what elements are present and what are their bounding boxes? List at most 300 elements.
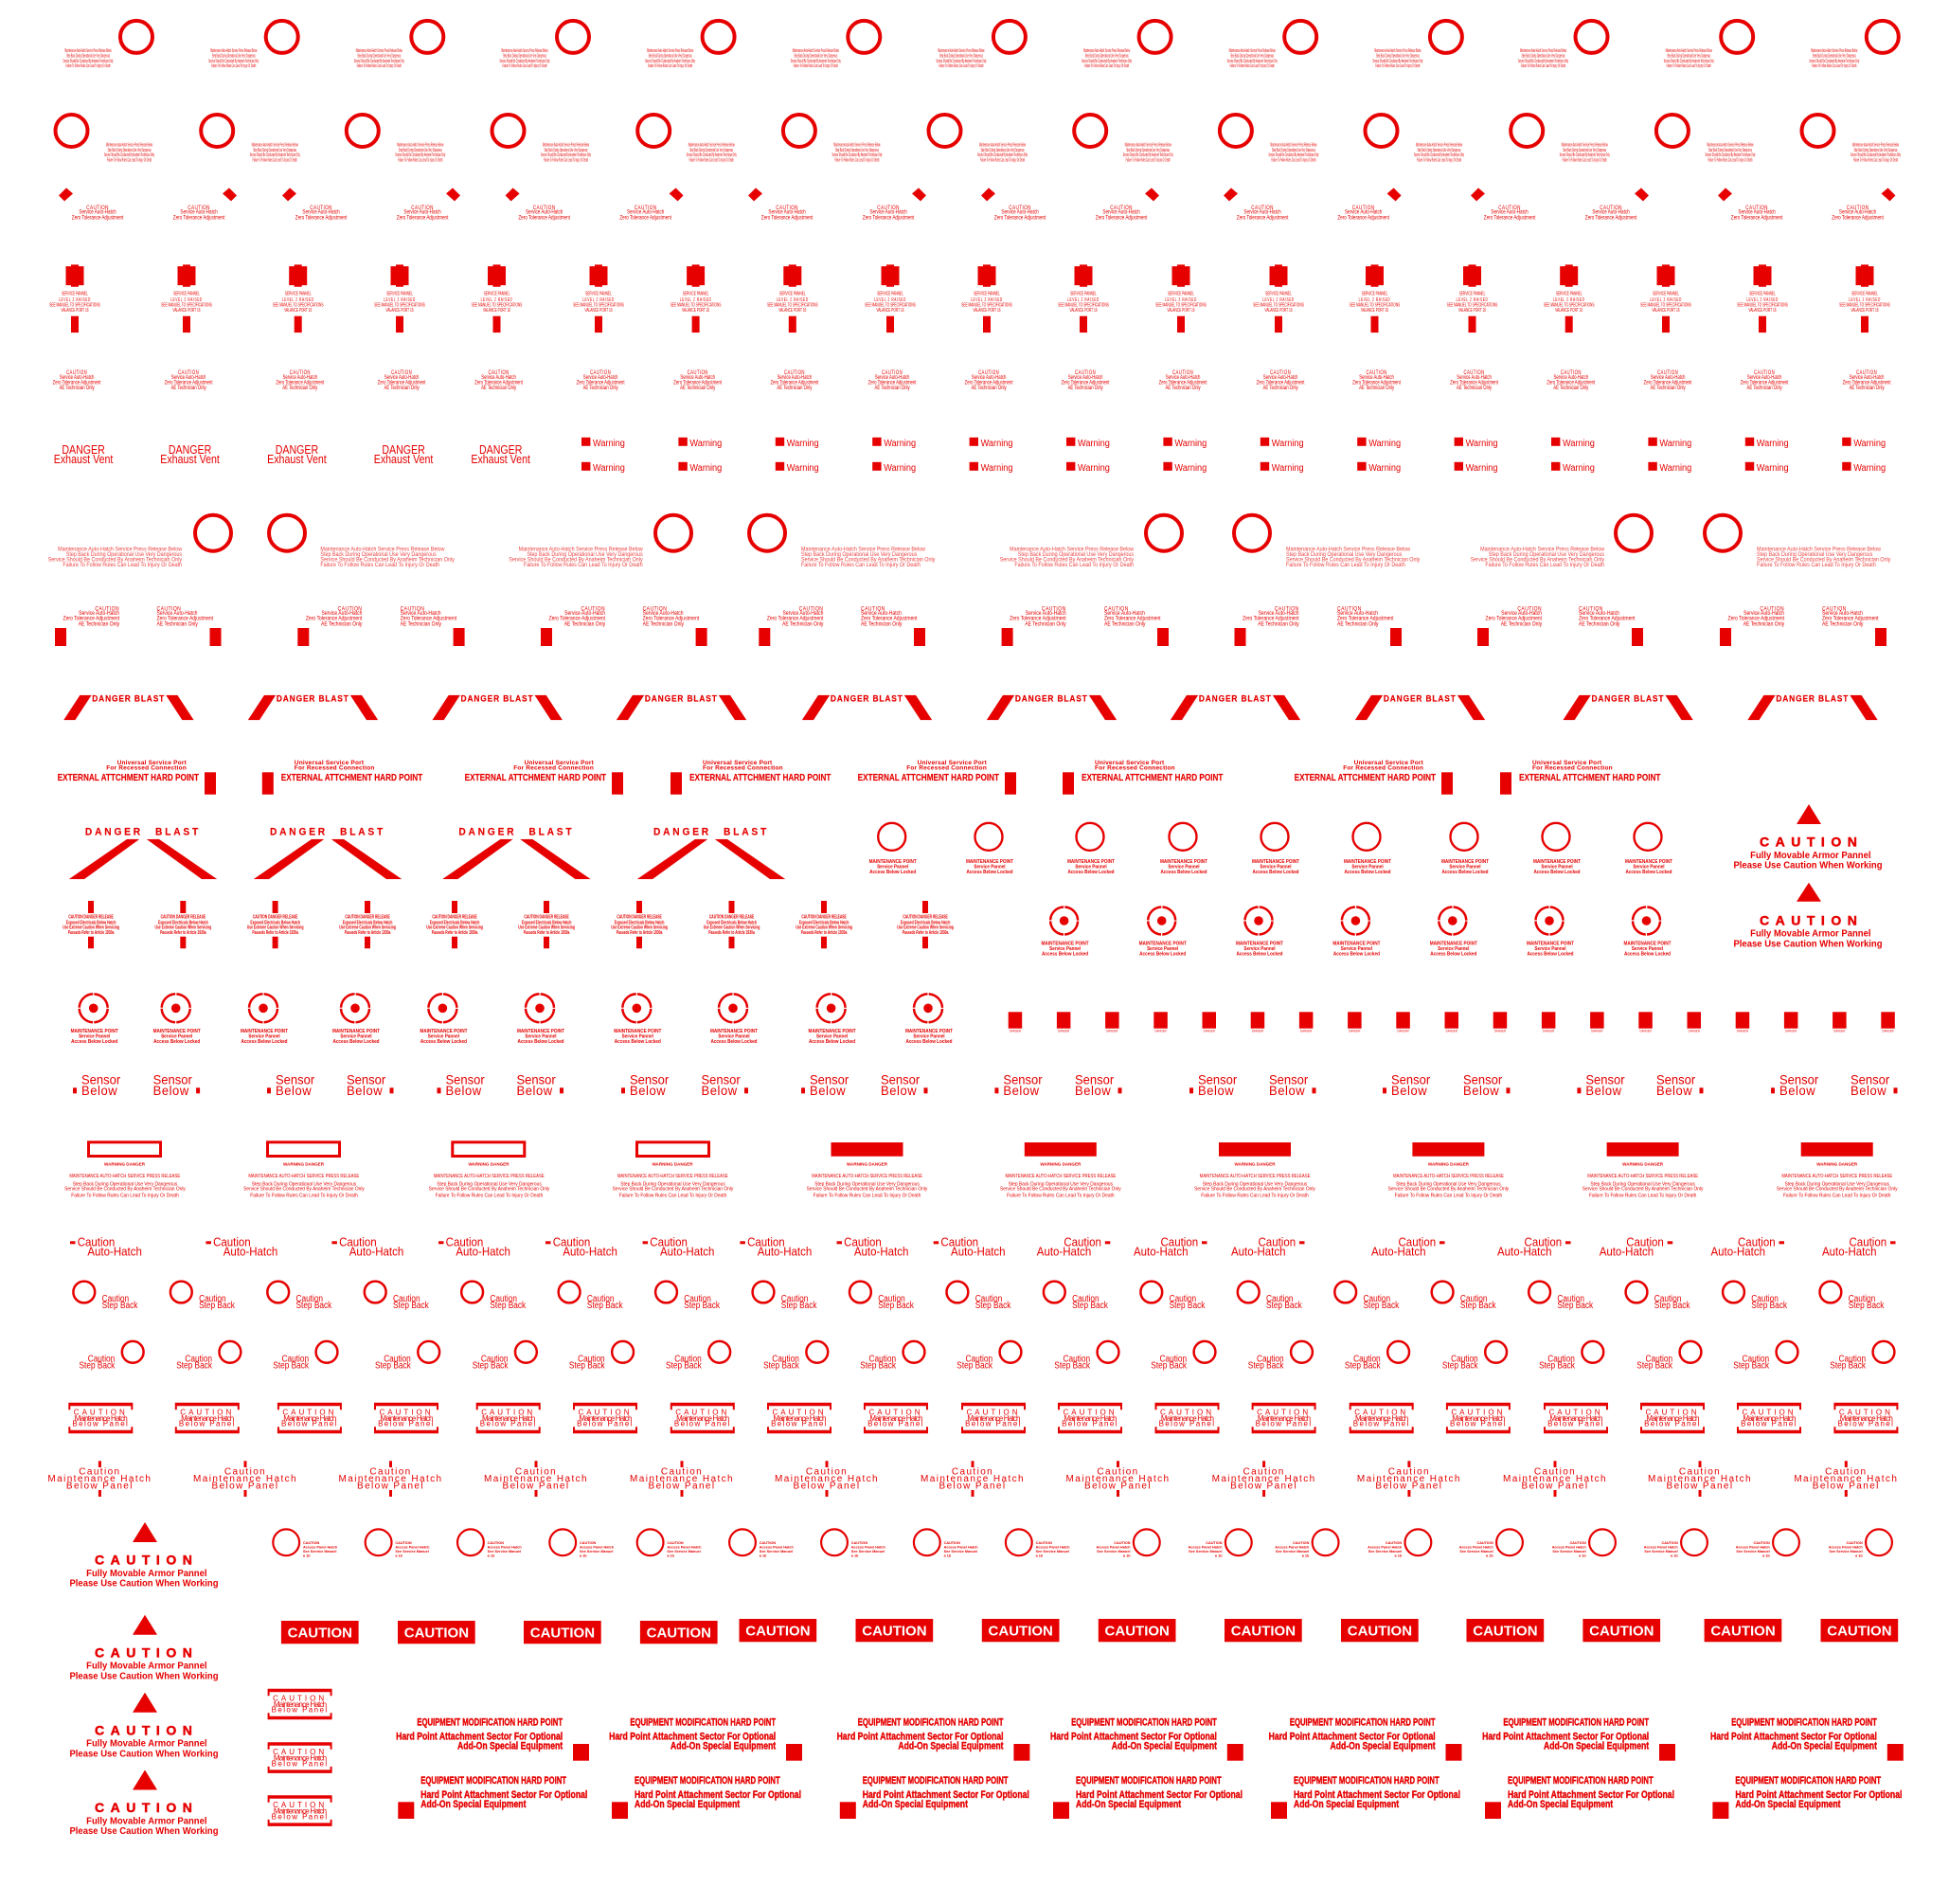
access sign: See Service Manuel xyxy=(395,1549,429,1554)
sign: VALANCE PORT 16 xyxy=(1652,307,1680,313)
sign: Maintenance Auto-Hatch Service Press Release Below xyxy=(1125,143,1171,148)
access sign: Access Panel Hatch xyxy=(1829,1544,1863,1550)
maintenance point xyxy=(1252,823,1299,875)
step back: Step Back xyxy=(176,1360,212,1370)
warning panel: WARNING DANGER xyxy=(469,1161,510,1166)
access sign: CAUTION xyxy=(1293,1540,1309,1545)
label: Caution xyxy=(650,1235,688,1249)
sign: Zero Tolerance Adjustment xyxy=(994,215,1046,222)
warning xyxy=(581,438,625,449)
bracket label: Below Panel xyxy=(1837,1420,1894,1428)
sign: CAUTION xyxy=(188,205,210,211)
bracket label: Below Panel xyxy=(867,1420,924,1428)
step back xyxy=(763,1341,828,1370)
access sign: CAUTION xyxy=(760,1540,776,1545)
bracket label: Maintenance Hatch xyxy=(676,1414,729,1423)
text block: CAUTION xyxy=(1856,369,1877,376)
hard point: EXTERNAL ATTCHMENT HARD POINT xyxy=(58,771,199,782)
warning panel: Failure To Follow Rules Can Lead To Injury Or Death xyxy=(619,1193,726,1198)
sign xyxy=(1705,515,1891,568)
sign: SERVICE PANNEL xyxy=(484,291,510,296)
warning panel: MAINTENANCE AUTO-HATCH SERVICE PRESS RELEASE xyxy=(1200,1173,1311,1179)
target: Service Pannel xyxy=(816,1033,849,1040)
warning: Warning xyxy=(1174,439,1207,449)
label: DANGER xyxy=(276,443,318,457)
badge xyxy=(398,1621,475,1644)
row: warning danger filled boxes xyxy=(807,1142,1898,1198)
warning panel: Step Back During Operational Use Very Dangerous xyxy=(437,1181,542,1187)
sign: Zero Tolerance Adjustment xyxy=(1010,616,1066,622)
sign: Failure To Follow Rules Can Lead To Injury Or Death xyxy=(834,157,879,163)
warning panel: Failure To Follow Rules Can Lead To Injury Or Death xyxy=(1589,1193,1696,1198)
warning panel: WARNING DANGER xyxy=(1040,1161,1082,1166)
hatch label: Below Panel xyxy=(1813,1482,1880,1492)
text block: Service Auto-Hatch xyxy=(1068,374,1102,381)
hard point: Hard Point Attachment Sector For Optional xyxy=(1294,1789,1460,1801)
text block: Service Auto-Hatch xyxy=(171,374,206,381)
maintenance point xyxy=(1533,823,1581,875)
warning xyxy=(1261,462,1304,474)
release sign: Use Extreme Caution When Servicing xyxy=(426,925,483,930)
bracket label: Below Panel xyxy=(378,1420,435,1428)
text block: Zero Tolerance Adjustment xyxy=(770,380,819,386)
access sign: Access Panel Hatch xyxy=(851,1544,885,1550)
label xyxy=(837,1235,908,1259)
access sign xyxy=(1644,1529,1708,1557)
bracket label: Maintenance Hatch xyxy=(482,1414,535,1423)
danger block: DANGER xyxy=(1639,1029,1652,1033)
row: small circles with text right xyxy=(273,1529,1070,1557)
step back xyxy=(655,1282,720,1310)
sign xyxy=(1839,264,1890,332)
label: Caution xyxy=(553,1235,590,1249)
sign: LEVEL 2 RAISED xyxy=(1849,296,1881,302)
sign: CAUTION xyxy=(310,205,332,211)
maintenance point: Service Pannel xyxy=(1633,864,1665,871)
step back: Caution xyxy=(578,1354,605,1363)
target xyxy=(1430,907,1477,958)
sign: Service Auto-Hatch xyxy=(1026,610,1066,617)
bracket label: CAUTION xyxy=(1646,1408,1699,1417)
sign: Failure To Follow Rules Can Lead To Injury Or Death xyxy=(648,63,692,68)
step back: Caution xyxy=(1451,1354,1478,1363)
hard point: EXTERNAL ATTCHMENT HARD POINT xyxy=(858,771,999,782)
label: Auto-Hatch xyxy=(563,1245,617,1259)
sensor: Below xyxy=(1585,1084,1622,1098)
label: Auto-Hatch xyxy=(1134,1245,1188,1259)
release sign: CAUTION DANGER RELEASE xyxy=(161,914,206,920)
sensor: Sensor xyxy=(1198,1072,1237,1087)
sign: AE Technician Only xyxy=(79,621,119,628)
hard point: Universal Service Port xyxy=(1095,760,1164,766)
sign: Step Back During Operational Use Very Dangerous xyxy=(527,552,643,558)
text block: AE Technician Only xyxy=(680,385,715,391)
danger block: DANGER xyxy=(1446,1029,1457,1033)
warning panel xyxy=(1777,1142,1898,1198)
bracket label: Maintenance Hatch xyxy=(181,1414,234,1423)
sign: LEVEL 2 RAISED xyxy=(1650,296,1682,302)
sign: LEVEL 2 RAISED xyxy=(582,296,615,302)
danger blast xyxy=(63,693,193,720)
maintenance point: Service Pannel xyxy=(1075,864,1107,871)
bracket label: Maintenance Hatch xyxy=(1452,1414,1505,1423)
label: Caution xyxy=(1161,1235,1198,1249)
sign: Failure To Follow Rules Can Lead To Injury Or Death xyxy=(1230,63,1275,68)
label xyxy=(1037,1235,1110,1259)
sign: AE Technician Only xyxy=(1501,621,1542,628)
row: small circles with text left xyxy=(1097,1529,1892,1557)
maintenance point: MAINTENANCE POINT xyxy=(1252,860,1299,865)
hatch label: Maintenance Hatch xyxy=(1212,1474,1316,1484)
caution block xyxy=(69,1769,219,1837)
step back xyxy=(273,1341,337,1370)
row: service panel signs xyxy=(49,264,1890,332)
hard point xyxy=(837,1716,1029,1761)
text block: Service Auto-Hatch xyxy=(1747,374,1781,381)
sign xyxy=(273,264,324,332)
hard point: EQUIPMENT MODIFICATION HARD POINT xyxy=(1290,1716,1436,1729)
row: warning labels upper xyxy=(581,438,1886,449)
text block: Zero Tolerance Adjustment xyxy=(673,380,722,386)
hatch label: Caution xyxy=(661,1466,703,1477)
step back xyxy=(1529,1282,1594,1310)
sign: AE Technician Only xyxy=(1579,621,1619,628)
sign: Service Should Be Conducted By Anaheim Technician Only xyxy=(1664,59,1714,63)
access sign: CAUTION xyxy=(667,1540,684,1545)
hard point xyxy=(262,760,422,795)
sign: Service Auto-Hatch xyxy=(564,610,605,617)
bracket label: Below Panel xyxy=(272,1759,329,1768)
sign: Maintenance Auto-Hatch Service Press Release Below xyxy=(58,547,182,553)
sign: LEVEL 2 RAISED xyxy=(170,296,203,302)
hatch label: Caution xyxy=(369,1466,412,1477)
hard point xyxy=(1485,1775,1674,1819)
sign xyxy=(208,21,298,68)
sign: Failure To Follow Rules Can Lead To Injury Or Death xyxy=(689,157,734,163)
access sign: Access Panel Hatch xyxy=(395,1544,430,1550)
sign: Service Should Be Conducted By Anaheim Technician Only xyxy=(63,59,114,63)
label: Exhaust Vent xyxy=(54,453,114,466)
sensor: Sensor xyxy=(1269,1072,1308,1087)
warning panel xyxy=(613,1142,734,1198)
step back: Step Back xyxy=(684,1300,720,1310)
danger block: DANGER xyxy=(1106,1029,1118,1033)
badge: CAUTION xyxy=(1710,1624,1776,1640)
release sign: CAUTION DANGER RELEASE xyxy=(345,914,390,920)
hard point xyxy=(1710,1716,1904,1761)
hatch label: Below Panel xyxy=(648,1482,716,1492)
sign xyxy=(269,515,455,568)
text block: Zero Tolerance Adjustment xyxy=(1450,380,1498,386)
text block: Zero Tolerance Adjustment xyxy=(577,380,625,386)
warning panel: MAINTENANCE AUTO-HATCH SERVICE PRESS RELEASE xyxy=(434,1173,545,1179)
bracket label: Maintenance Hatch xyxy=(274,1806,327,1815)
row: equipment hard points upper xyxy=(396,1716,1904,1761)
sign xyxy=(1579,606,1643,646)
warning panel: Failure To Follow Rules Can Lead To Injury Or Death xyxy=(436,1193,543,1198)
label xyxy=(545,1235,617,1259)
hard point xyxy=(1482,1716,1675,1761)
hatch label: Below Panel xyxy=(939,1482,1006,1492)
bracket label: CAUTION xyxy=(74,1408,128,1417)
danger blast xyxy=(69,826,217,879)
label: Caution xyxy=(1738,1235,1776,1249)
warning: Warning xyxy=(1466,439,1497,449)
sign: Maintenance Auto-Hatch Service Press Release Below xyxy=(1520,48,1566,54)
label: Caution xyxy=(1259,1235,1296,1249)
step back: Caution xyxy=(1170,1293,1196,1303)
label: Caution xyxy=(1525,1235,1562,1249)
danger blast xyxy=(1564,693,1693,720)
step back: Caution xyxy=(781,1293,808,1303)
label xyxy=(1231,1235,1305,1259)
sign: Zero Tolerance Adjustment xyxy=(863,215,915,222)
sensor: Sensor xyxy=(881,1072,920,1087)
target: Service Pannel xyxy=(913,1033,945,1040)
hatch label: Below Panel xyxy=(212,1482,278,1492)
sensor xyxy=(267,1072,315,1098)
access sign: a 1b xyxy=(1302,1553,1310,1557)
sign: CAUTION xyxy=(1745,205,1768,211)
sensor: Below xyxy=(1075,1084,1111,1098)
text block: Zero Tolerance Adjustment xyxy=(1547,380,1596,386)
access sign: Access Panel Hatch xyxy=(1552,1544,1586,1550)
row: warning danger outlined boxes xyxy=(64,1142,734,1198)
release sign xyxy=(426,901,483,948)
release sign: CAUTION DANGER RELEASE xyxy=(253,914,297,920)
sensor xyxy=(1383,1072,1431,1098)
label: Auto-Hatch xyxy=(1497,1245,1551,1259)
release sign: Passeds Refer to Article 1930a xyxy=(252,929,298,935)
sign: CAUTION xyxy=(1104,606,1129,613)
text block: CAUTION xyxy=(1075,369,1096,376)
bracket label: Below Panel xyxy=(72,1420,129,1428)
sensor xyxy=(1189,1072,1238,1098)
sign: LEVEL 2 RAISED xyxy=(384,296,416,302)
hard point xyxy=(58,760,216,795)
sign: CAUTION xyxy=(877,205,900,211)
sign: Step Back During Operational Use Very Dangerous xyxy=(1376,54,1420,59)
hatch label: Below Panel xyxy=(1375,1482,1442,1492)
target: MAINTENANCE POINT xyxy=(420,1030,467,1034)
warning xyxy=(1842,438,1886,449)
bracket label xyxy=(68,1403,133,1433)
sign xyxy=(861,606,925,646)
warning xyxy=(970,438,1012,449)
bracket label xyxy=(1058,1403,1122,1433)
warning panel: Step Back During Operational Use Very Dangerous xyxy=(1203,1181,1307,1187)
hatch label: Caution xyxy=(1679,1466,1721,1477)
label: DANGER xyxy=(479,443,522,457)
release sign: Exposed Electricals Below Hatch xyxy=(799,920,849,925)
access sign xyxy=(914,1529,978,1557)
bracket label xyxy=(864,1403,928,1433)
step back xyxy=(559,1282,623,1310)
hatch label xyxy=(1357,1461,1461,1497)
step back: Step Back xyxy=(80,1360,116,1370)
label: Auto-Hatch xyxy=(951,1245,1006,1259)
sign: Step Back During Operational Use Very Dangerous xyxy=(1085,54,1129,59)
bracket label: CAUTION xyxy=(273,1801,327,1809)
target: Service Pannel xyxy=(161,1033,193,1040)
target: MAINTENANCE POINT xyxy=(809,1030,856,1034)
sign: Zero Tolerance Adjustment xyxy=(295,215,348,222)
danger block: DANGER xyxy=(1349,1029,1361,1033)
sign xyxy=(282,188,348,222)
access sign: CAUTION xyxy=(303,1540,319,1545)
sign: AE Technician Only xyxy=(1822,621,1863,628)
hatch label: Maintenance Hatch xyxy=(1794,1474,1898,1484)
maintenance point: Access Below Locked xyxy=(869,870,916,875)
warning panel: MAINTENANCE AUTO-HATCH SERVICE PRESS RELEASE xyxy=(1005,1173,1117,1179)
warning panel xyxy=(1194,1142,1315,1198)
sensor: Below xyxy=(276,1084,312,1098)
sign xyxy=(1518,21,1608,68)
access sign: See Service Manuel xyxy=(1829,1549,1863,1554)
warning xyxy=(1455,438,1497,449)
sign: Zero Tolerance Adjustment xyxy=(1337,616,1394,622)
sign xyxy=(748,188,814,222)
sign xyxy=(791,21,880,68)
sign: VALANCE PORT 16 xyxy=(172,307,201,313)
danger blast xyxy=(1748,693,1877,720)
hard point xyxy=(858,760,1016,795)
text block: Zero Tolerance Adjustment xyxy=(868,380,917,386)
sign: AE Technician Only xyxy=(1104,621,1145,628)
sign: Step Back During Operational Use Very Dangerous xyxy=(212,54,256,59)
hard point xyxy=(465,760,623,795)
step back xyxy=(170,1282,235,1310)
sign: Service Should Be Conducted By Anaheim Technician Only xyxy=(1227,59,1278,63)
sign xyxy=(374,264,425,332)
sign: Zero Tolerance Adjustment xyxy=(397,215,449,222)
warning panel: MAINTENANCE AUTO-HATCH SERVICE PRESS RELEASE xyxy=(617,1173,728,1179)
sign: LEVEL 2 RAISED xyxy=(282,296,314,302)
target: Access Below Locked xyxy=(517,1039,564,1045)
step back: Caution xyxy=(1547,1354,1575,1363)
maintenance point: Service Pannel xyxy=(1449,864,1481,871)
step back xyxy=(1442,1341,1507,1370)
step back: Step Back xyxy=(1266,1300,1302,1310)
warning xyxy=(1551,462,1595,474)
badge: CAUTION xyxy=(1827,1624,1892,1640)
label xyxy=(438,1235,510,1259)
row: caution step back then circle xyxy=(80,1341,1894,1370)
step back: Caution xyxy=(587,1293,614,1303)
caution block xyxy=(1733,804,1883,871)
sign: AE Technician Only xyxy=(1258,621,1299,628)
hard point: Add-On Special Equipment xyxy=(1076,1799,1182,1810)
warning xyxy=(1066,438,1110,449)
hard point: Hard Point Attachment Sector For Optional xyxy=(609,1731,776,1743)
danger block xyxy=(1688,1012,1701,1033)
maintenance point: MAINTENANCE POINT xyxy=(1441,860,1489,865)
target: MAINTENANCE POINT xyxy=(241,1030,288,1034)
hatch label: Maintenance Hatch xyxy=(775,1474,879,1484)
text block: Zero Tolerance Adjustment xyxy=(1159,380,1207,386)
danger blast: DANGER BLAST xyxy=(1015,693,1088,704)
label: DANGER xyxy=(62,443,105,457)
step back: Caution xyxy=(1353,1354,1381,1363)
sign: SERVICE PANNEL xyxy=(1851,291,1878,296)
sign: Step Back During Operational Use Very Dangerous xyxy=(801,552,917,558)
sign: Maintenance Auto-Hatch Service Press Release Below xyxy=(647,48,693,54)
target: Service Pannel xyxy=(340,1033,372,1040)
target xyxy=(517,994,564,1045)
sign: VALANCE PORT 16 xyxy=(1555,307,1583,313)
sign: SERVICE PANNEL xyxy=(877,291,903,296)
bracket label: CAUTION xyxy=(180,1408,234,1417)
warning panel xyxy=(243,1142,365,1198)
step back: Step Back xyxy=(781,1300,817,1310)
step back: Caution xyxy=(1557,1293,1584,1303)
target: Access Below Locked xyxy=(1430,951,1476,958)
sign: Maintenance Auto-Hatch Service Press Release Below xyxy=(1562,143,1608,148)
hard point: Hard Point Attachment Sector For Optional xyxy=(1050,1731,1217,1743)
sign: LEVEL 2 RAISED xyxy=(1553,296,1585,302)
step back xyxy=(569,1341,634,1370)
release sign xyxy=(247,901,304,948)
label: Caution xyxy=(213,1235,251,1249)
sensor xyxy=(1771,1072,1819,1098)
sign: Maintenance Auto-Hatch Service Press Release Below xyxy=(1083,48,1130,54)
step back: Caution xyxy=(282,1354,309,1363)
text block: Zero Tolerance Adjustment xyxy=(965,380,1013,386)
hard point xyxy=(1500,760,1661,795)
sign: VALANCE PORT 16 xyxy=(584,307,613,313)
step back: Step Back xyxy=(490,1300,527,1310)
sensor: Sensor xyxy=(1003,1072,1043,1087)
sign: AE Technician Only xyxy=(564,621,605,628)
target: Service Pannel xyxy=(1341,946,1373,952)
hard point: EQUIPMENT MODIFICATION HARD POINT xyxy=(1508,1775,1654,1787)
step back xyxy=(1054,1341,1118,1370)
access sign: Access Panel Hatch xyxy=(580,1544,615,1550)
sign xyxy=(354,21,443,68)
danger blast: DANGER BLAST xyxy=(645,693,718,704)
sign: SERVICE PANNEL xyxy=(1070,291,1097,296)
text block: CAUTION xyxy=(1754,369,1775,376)
target xyxy=(332,994,380,1045)
hatch label xyxy=(47,1461,152,1497)
sign: CAUTION xyxy=(401,606,424,613)
hard point: Hard Point Attachment Sector For Optional xyxy=(1482,1731,1649,1743)
warning panel: Step Back During Operational Use Very Dangerous xyxy=(1396,1181,1501,1187)
label: Caution xyxy=(940,1235,978,1249)
sign: CAUTION xyxy=(1042,606,1066,613)
badge xyxy=(1582,1619,1660,1642)
warning panel xyxy=(1582,1142,1704,1198)
caution block: Fully Movable Armor Pannel xyxy=(86,1816,207,1827)
sign: Service Should Be Conducted By Anaheim Technician Only xyxy=(1518,59,1568,63)
hard point: EQUIPMENT MODIFICATION HARD POINT xyxy=(863,1775,1009,1787)
sign xyxy=(1720,606,1784,646)
sign: VALANCE PORT 16 xyxy=(1851,307,1879,313)
sign: Service Auto-Hatch xyxy=(403,209,441,216)
text block: Zero Tolerance Adjustment xyxy=(53,380,101,386)
danger block: DANGER xyxy=(1689,1029,1700,1033)
access sign: a 1b xyxy=(488,1553,495,1557)
text block: AE Technician Only xyxy=(583,385,618,391)
hard point xyxy=(1050,1716,1243,1761)
sign xyxy=(961,264,1012,332)
bracket label: Maintenance Hatch xyxy=(1743,1414,1796,1423)
hard point: Universal Service Port xyxy=(1354,760,1423,766)
sign: Maintenance Auto-Hatch Service Press Release Below xyxy=(1480,547,1604,553)
caution block: Please Use Caution When Working xyxy=(69,1671,219,1681)
sign: Zero Tolerance Adjustment xyxy=(549,616,605,622)
sign: Step Back During Operational Use Very Dangerous xyxy=(1522,54,1565,59)
